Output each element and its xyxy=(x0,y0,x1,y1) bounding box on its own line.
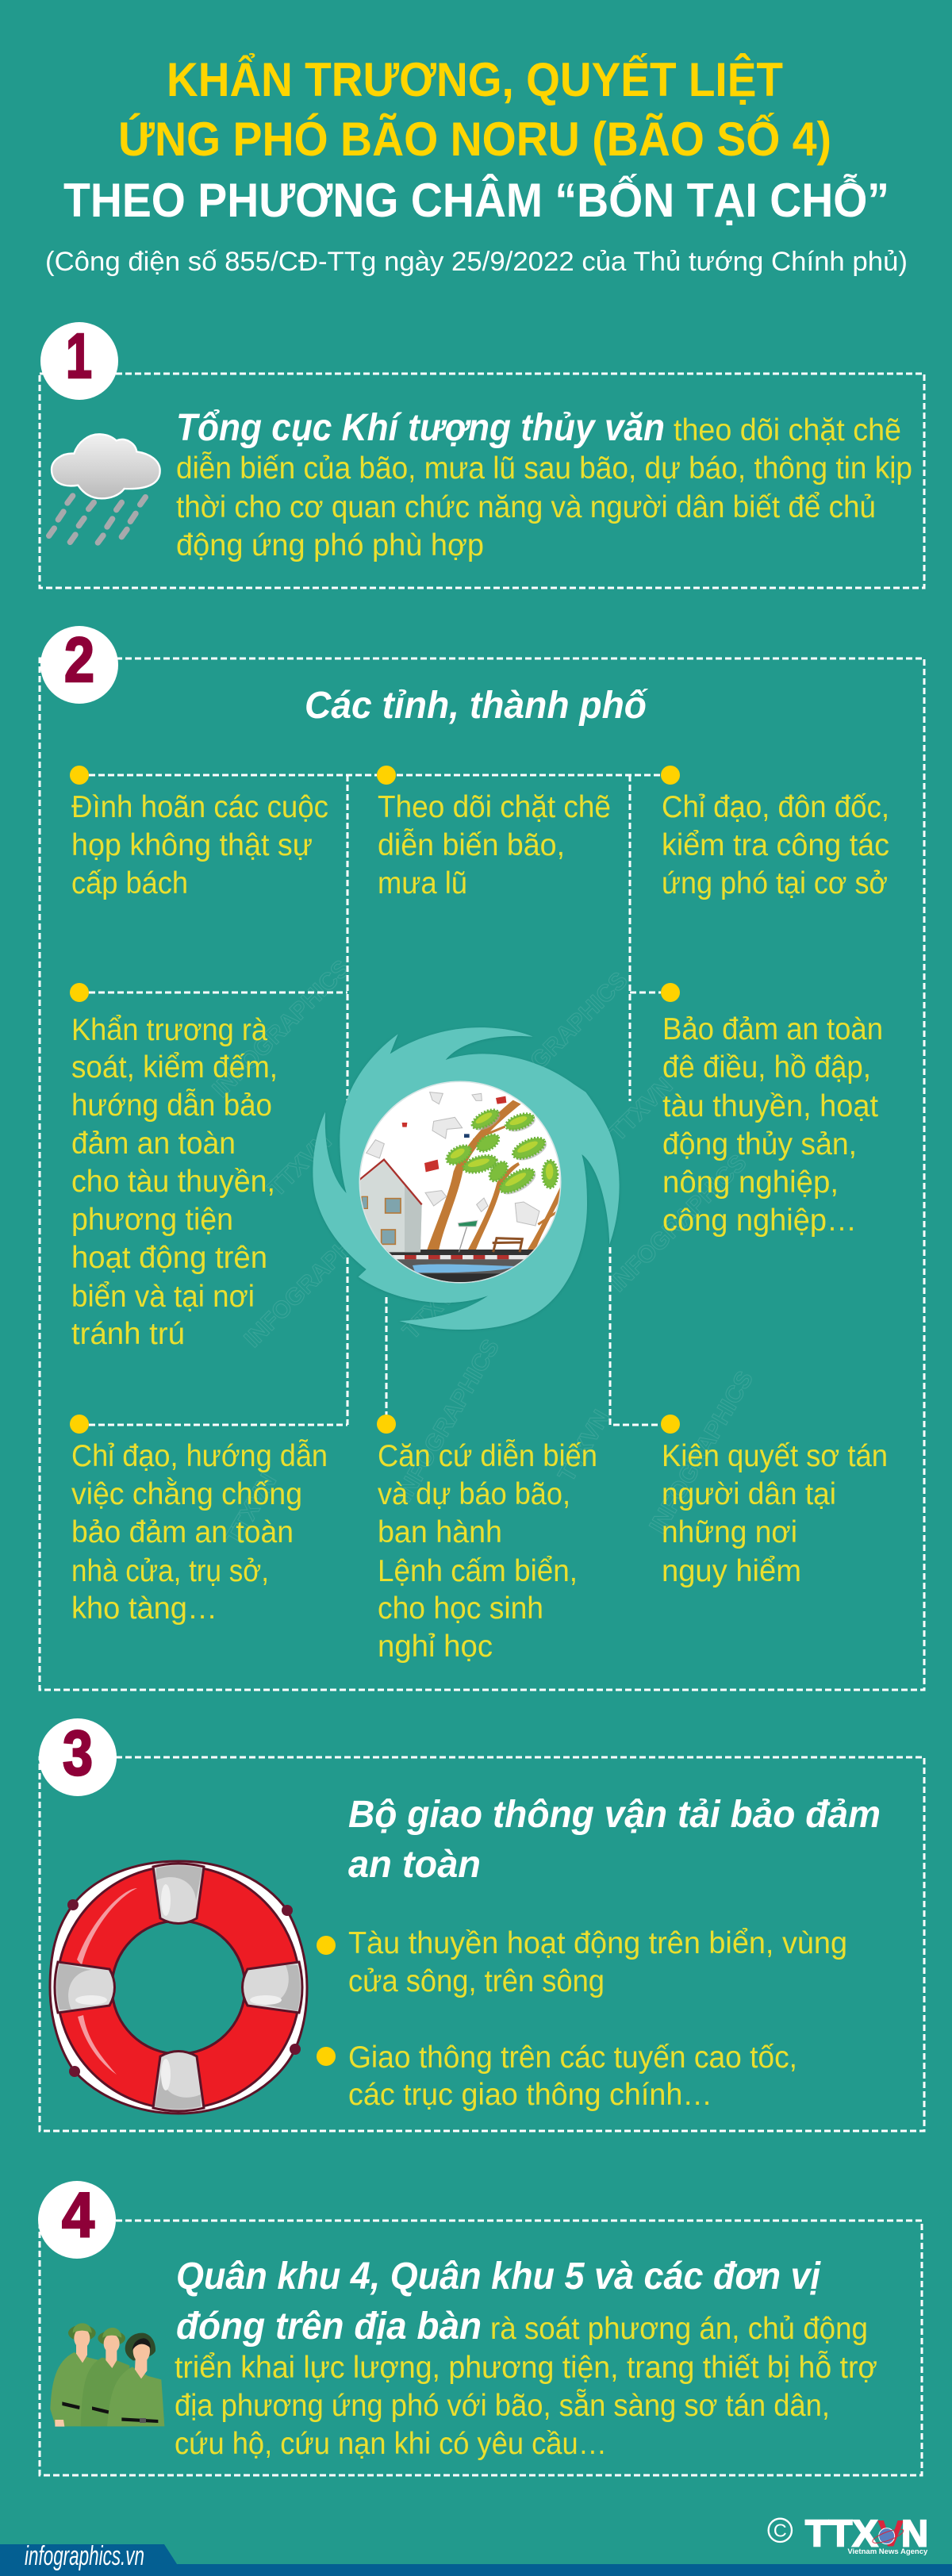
text: urgent review of vessels: tránh trú xyxy=(71,1317,185,1351)
number badge 3 xyxy=(39,1718,117,1796)
row 1 dots xyxy=(70,766,680,785)
illustration: storm swirl with house and trees xyxy=(313,1027,620,1330)
text: evacuate residents: những nơi xyxy=(662,1515,797,1549)
watermarks: INFOGRAPHICS xyxy=(208,955,355,1103)
text: housing safety: nhà cửa, trụ sở, xyxy=(71,1554,269,1588)
text: sea ban order: cho học sinh xyxy=(378,1591,543,1626)
panel 2: provinces and cities xyxy=(40,624,924,1690)
text: evacuate residents: Kiên quyết sơ tán xyxy=(662,1439,888,1473)
number badge 4: 4 xyxy=(62,2179,94,2250)
title line 1: KHẨN TRƯƠNG, QUYẾT LIỆT xyxy=(167,53,783,106)
icon: rain cloud xyxy=(49,434,160,543)
heading: transport ministry: Bộ giao thông vận tải bảo đảm xyxy=(348,1794,881,1836)
logo: TTXVN: TTX xyxy=(805,2512,878,2554)
row 2 dots xyxy=(70,983,680,1002)
panel 3: transport ministry xyxy=(39,1718,924,2131)
text: urgent review of vessels: Khẩn trương rà xyxy=(71,1013,267,1047)
watermarks: INFOGRAPHICS xyxy=(644,1367,758,1538)
footer band xyxy=(0,2541,952,2576)
number badge 3: 3 xyxy=(63,1718,93,1788)
watermarks: INFOGRAPHICS xyxy=(486,967,633,1115)
heading: provinces: Các tỉnh, thành phố xyxy=(305,685,649,727)
heading: transport ministry: an toàn xyxy=(348,1844,481,1886)
title block xyxy=(45,53,908,277)
bullet: road traffic: Giao thông trên các tuyến cao tốc, xyxy=(348,2040,797,2075)
text: urgent review of vessels: đảm an toàn xyxy=(71,1127,236,1161)
bullet: road traffic: các trục giao thông chính… xyxy=(348,2078,712,2112)
heading: transport ministry xyxy=(348,1794,881,1886)
heading: military zones xyxy=(176,2255,822,2348)
text: urgent review of vessels: phương tiện xyxy=(71,1203,233,1237)
text: urgent review of vessels: cho tàu thuyền, xyxy=(71,1165,275,1199)
icon: three soldiers xyxy=(50,2323,164,2427)
swirl xyxy=(313,1027,620,1330)
heading: military zones: Quân khu 4, Quân khu 5 và các đơn vị xyxy=(176,2255,822,2298)
text: weather agency heading: Tổng cục Khí tượng thủy văn xyxy=(176,407,665,449)
watermarks xyxy=(208,955,758,1550)
logo: TTXVN: Vietnam News Agency xyxy=(847,2547,927,2555)
watermarks: INFOGRAPHICS xyxy=(605,1150,752,1297)
text: ensure safety of dikes: Bảo đảm an toàn xyxy=(662,1012,883,1046)
text: postpone meetings: cấp bách xyxy=(71,866,188,900)
subtitle: (Công điện số 855/CĐ-TTg ngày 25/9/2022 của Thủ tướng Chính phủ) xyxy=(45,247,908,277)
logo: TTXVN: C xyxy=(774,2520,787,2541)
bullet: vessels: Tàu thuyền hoạt động trên biển, vùng xyxy=(348,1926,847,1960)
text: urgent review of vessels: soát, kiểm đếm, xyxy=(71,1050,278,1085)
text: postpone meetings: họp không thật sự xyxy=(71,828,313,862)
text: urgent review of vessels: biển và tại nơi xyxy=(71,1280,255,1314)
text: evacuate residents: nguy hiểm xyxy=(662,1554,801,1588)
bullet: vessels xyxy=(317,1926,847,1998)
text: sea ban order: Lệnh cấm biển, xyxy=(378,1554,578,1588)
watermarks: INFOGRAPHICS xyxy=(240,1205,387,1353)
text: sea ban order: Căn cứ diễn biến xyxy=(378,1439,597,1473)
text: urgent review of vessels xyxy=(71,1013,278,1351)
text: evacuate residents: người dân tại xyxy=(662,1477,836,1511)
text: military zones body: cứu hộ, cứu nạn khi có yêu cầu… xyxy=(175,2427,607,2461)
text: military zones body: triển khai lực lượng, phương tiện, trang thiết bị hỗ trợ xyxy=(175,2351,877,2385)
text: monitor storm: diễn biến bão, xyxy=(378,828,565,862)
text: monitor storm: Theo dõi chặt chẽ xyxy=(378,790,611,824)
text: military zones body: rà soát phương án, chủ động xyxy=(490,2312,868,2346)
text: ensure safety of dikes: đê điều, hồ đập, xyxy=(662,1050,871,1085)
text: evacuate residents xyxy=(662,1439,888,1588)
text: postpone meetings xyxy=(71,790,328,900)
bullet: road traffic xyxy=(317,2040,797,2112)
storm scene xyxy=(357,1092,569,1286)
website label: infographics.vn xyxy=(25,2541,144,2571)
text: housing safety: kho tàng… xyxy=(71,1591,217,1626)
watermarks: INFOGRAPHICS xyxy=(390,1335,505,1506)
text: ensure safety of dikes: động thủy sản, xyxy=(662,1127,857,1161)
title line 3: THEO PHƯƠNG CHÂM “BỐN TẠI CHỖ” xyxy=(63,174,889,227)
text: monitor storm: mưa lũ xyxy=(378,866,467,900)
text: ensure safety of dikes: tàu thuyền, hoạt xyxy=(662,1089,878,1123)
heading: military zones: đóng trên địa bàn xyxy=(176,2305,482,2348)
row 3 dots xyxy=(70,1415,680,1434)
text: urgent review of vessels: hướng dẫn bảo xyxy=(71,1088,272,1123)
text: sea ban order: nghỉ học xyxy=(378,1630,493,1664)
bullet: vessels: cửa sông, trên sông xyxy=(348,1964,605,1998)
number badge 2 xyxy=(40,624,118,704)
text: postpone meetings: Đình hoãn các cuộc xyxy=(71,790,328,824)
logo: TTXVN: V xyxy=(877,2512,904,2554)
panel 1: weather agency xyxy=(40,321,924,588)
panel 4: military zones xyxy=(38,2179,922,2475)
logo: TTXVN: N xyxy=(901,2512,928,2554)
title line 2: ỨNG PHÓ BÃO NORU (BÃO SỐ 4) xyxy=(118,113,831,166)
text: weather agency line 1: theo dõi chặt chẽ xyxy=(674,413,901,447)
text: direct and inspect: ứng phó tại cơ sở xyxy=(662,866,888,900)
text: direct and inspect: Chỉ đạo, đôn đốc, xyxy=(662,790,889,824)
logo: TTXVN xyxy=(769,2512,928,2555)
watermarks: TTXVN xyxy=(398,1271,471,1345)
watermarks: TTXVN xyxy=(605,1073,678,1146)
text: ensure safety of dikes: công nghiệp… xyxy=(662,1204,857,1238)
text: military zones body: địa phương ứng phó với bão, sẵn sàng sơ tán dân, xyxy=(175,2388,830,2423)
text: sea ban order xyxy=(378,1439,597,1664)
number badge 1: 1 xyxy=(66,321,92,391)
text: ensure safety of dikes: nông nghiệp, xyxy=(662,1165,839,1200)
watermarks: TTXVN xyxy=(220,1469,282,1550)
watermarks: TTXVN xyxy=(263,1128,336,1202)
text: urgent review of vessels: hoạt động trên xyxy=(71,1241,267,1275)
text: weather agency line 4: động ứng phó phù hợp xyxy=(176,528,484,562)
text: sea ban order: ban hành xyxy=(378,1515,502,1549)
text: housing safety: việc chằng chống xyxy=(71,1477,302,1511)
text: housing safety: bảo đảm an toàn xyxy=(71,1515,294,1549)
number badge 1 xyxy=(40,321,118,400)
text: weather agency line 3: thời cho cơ quan chức năng và người dân biết để chủ xyxy=(176,490,876,524)
text: direct and inspect xyxy=(662,790,889,900)
text: housing safety: Chỉ đạo, hướng dẫn xyxy=(71,1439,328,1473)
icon: lifebuoy xyxy=(50,1861,307,2113)
text: ensure safety of dikes xyxy=(662,1012,883,1238)
text: weather agency line 2: diễn biến của bão, mưa lũ sau bão, dự báo, thông tin kịp xyxy=(176,451,912,486)
text: housing safety xyxy=(71,1439,328,1626)
text: military zones body xyxy=(175,2312,877,2461)
text: monitor storm xyxy=(378,790,611,900)
number badge 4 xyxy=(38,2179,116,2259)
text: direct and inspect: kiểm tra công tác xyxy=(662,828,889,862)
text: sea ban order: và dự báo bão, xyxy=(378,1477,570,1511)
number badge 2: 2 xyxy=(64,624,94,695)
watermarks: TTXVN xyxy=(553,1406,615,1487)
